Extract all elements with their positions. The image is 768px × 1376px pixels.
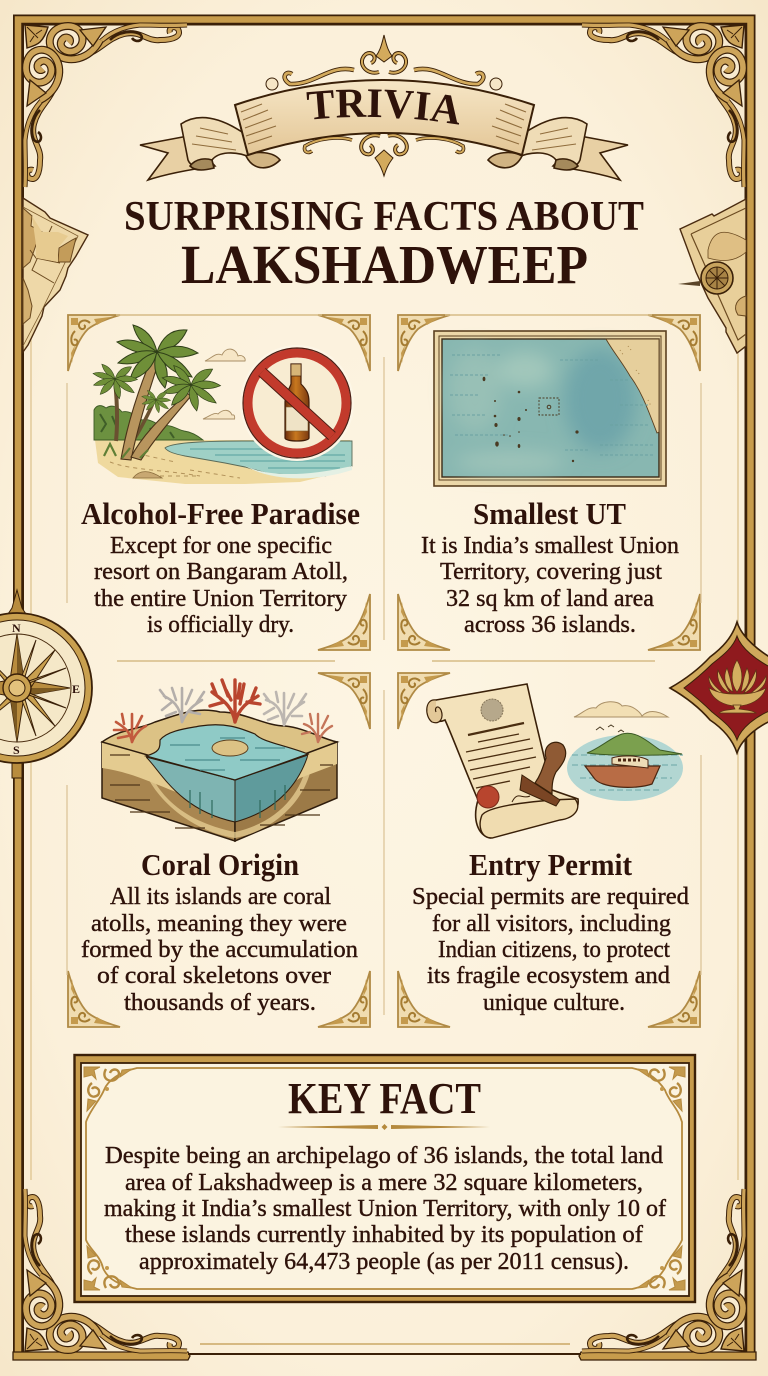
body text: [81, 884, 358, 1016]
main title: [124, 194, 644, 295]
body text: is officially dry.: [147, 612, 294, 638]
body text: approximately 64,473 people (as per 2011 census).: [139, 1249, 629, 1275]
body text: Indian citizens, to protect: [438, 937, 670, 963]
heading: Entry Permit: [469, 847, 633, 882]
body text: All its islands are coral: [110, 884, 331, 910]
body text: resort on Bangaram Atoll,: [94, 559, 348, 585]
body text: these islands currently inhabited by its population of: [125, 1222, 643, 1248]
title banner: [140, 34, 628, 182]
divider: [278, 1124, 490, 1130]
panel: entry permit: [412, 684, 689, 1016]
body text: [412, 884, 689, 1016]
panel: smallest UT: [421, 331, 679, 638]
decorative map: left: [23, 198, 88, 352]
body text: Special permits are required: [412, 884, 689, 910]
body text: 32 sq km of land area: [446, 586, 654, 612]
body text: the entire Union Territory: [94, 586, 347, 612]
body text: area of Lakshadweep is a mere 32 square kilometers,: [125, 1170, 643, 1196]
corner ornament: bottom left: [25, 1189, 187, 1351]
body text: for all visitors, including: [432, 911, 671, 937]
wooden stamp: [520, 742, 566, 806]
compass rose: [0, 590, 92, 778]
illustration: atoll cross-section block: [102, 680, 337, 841]
corner ornament: top left: [25, 25, 187, 187]
body text: [94, 533, 348, 638]
panel: coral origin: [81, 680, 358, 1016]
corner ornament: bottom right: [582, 1189, 744, 1351]
banner: hatching: [192, 104, 576, 150]
heading: Alcohol-Free Paradise: [81, 496, 360, 531]
body text: across 36 islands.: [464, 612, 636, 638]
body text: making it India’s smallest Union Territory, with only 10 of: [104, 1196, 666, 1222]
banner: right tail: [488, 118, 628, 180]
panel: alcohol-free paradise: [81, 325, 360, 638]
illustration: scroll, stamp, island and boat: [427, 684, 683, 838]
heading: Smallest UT: [473, 496, 626, 531]
body text: It is India’s smallest Union: [421, 533, 679, 559]
body text: unique culture.: [483, 990, 625, 1016]
decorative map: right with small compass: [678, 199, 746, 353]
compass rose: S: [13, 743, 20, 757]
scroll document: [428, 684, 578, 838]
banner: main ribbon: [235, 80, 534, 155]
corner ornament: top right: [582, 25, 744, 187]
banner: TRIVIA text: TRIVIA: [306, 89, 460, 125]
main title: LAKSHADWEEP: [181, 234, 588, 295]
box ornaments: [84, 1067, 685, 1290]
card ornaments and dividers: [67, 315, 701, 1027]
banner: left tail: [140, 118, 280, 180]
body text: Despite being an archipelago of 36 islands, the total land: [105, 1143, 663, 1169]
body text: Territory, covering just: [440, 559, 662, 585]
corals: [114, 680, 332, 742]
body text: [421, 533, 679, 638]
illustration: antique map: [434, 331, 666, 486]
illustration: beach with palms and no-alcohol sign: [93, 325, 354, 484]
body text: formed by the accumulation: [81, 937, 358, 963]
body text: atolls, meaning they were: [91, 911, 347, 937]
heading: Coral Origin: [141, 847, 299, 882]
body text: [104, 1143, 666, 1275]
heading: KEY FACT: [288, 1074, 481, 1123]
clouds: [203, 349, 245, 419]
palm trees: [93, 325, 221, 460]
body text: thousands of years.: [124, 990, 316, 1016]
main title: SURPRISING FACTS ABOUT: [124, 194, 644, 240]
compass rose: N: [12, 621, 21, 635]
no-alcohol sign: [240, 345, 354, 461]
body text: of coral skeletons over: [97, 963, 331, 989]
banner: ornament above: [266, 35, 502, 90]
compass rose: E: [72, 682, 80, 696]
body text: its fragile ecosystem and: [427, 963, 670, 989]
banner: ornament below: [305, 135, 463, 176]
island scene: [567, 702, 683, 801]
key fact box: [74, 1055, 695, 1302]
body text: Except for one specific: [110, 533, 332, 559]
emblem: red shield with lamp: [670, 622, 768, 753]
